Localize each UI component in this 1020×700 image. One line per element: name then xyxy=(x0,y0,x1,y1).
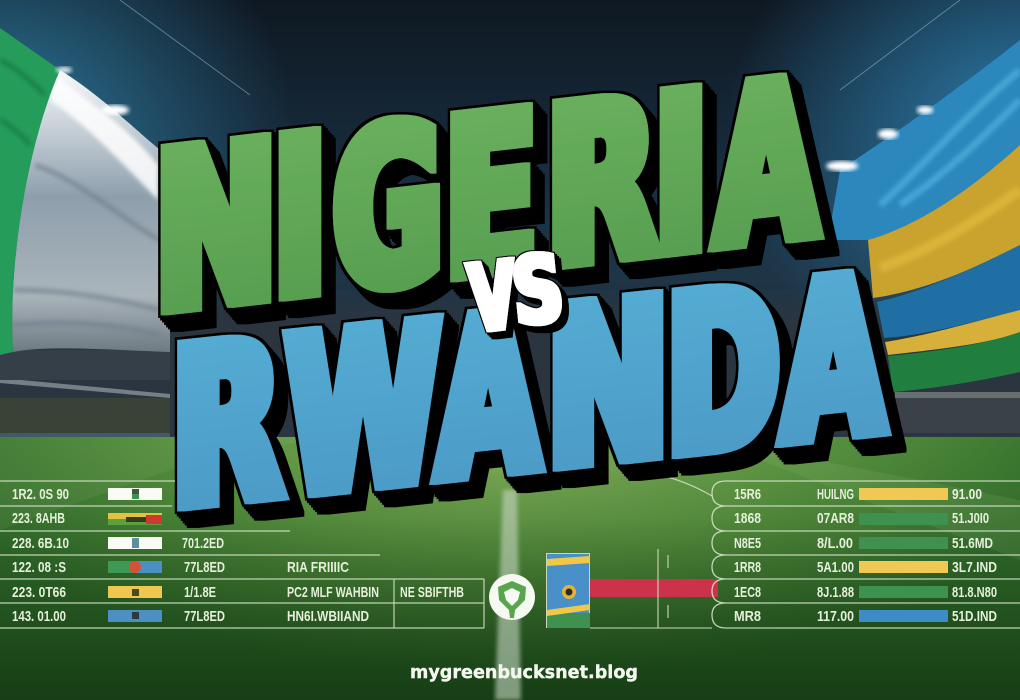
background: stadium stands xyxy=(0,305,1020,440)
title: NIGERIA: N xyxy=(155,95,277,361)
row 4: 3L7.IND xyxy=(952,559,997,576)
title: NIGERIA: R xyxy=(547,52,657,316)
title: RWANDA: N xyxy=(547,252,669,517)
row 4: 122. 08 :S xyxy=(12,559,66,576)
background: night sky xyxy=(0,0,1020,440)
row 6: 117.00 xyxy=(817,608,854,625)
flag: Rwanda xyxy=(828,40,1020,398)
row 5: 1EC8 xyxy=(734,584,761,601)
row 4 xyxy=(12,559,349,576)
row 2: 07AR8 xyxy=(817,510,854,527)
row 6: 143. 01.00 xyxy=(12,608,66,625)
row 5 xyxy=(734,584,997,601)
football pitch xyxy=(0,437,1020,700)
row 3: 228. 6B.10 xyxy=(12,535,69,552)
title: RWANDA: A xyxy=(782,230,884,492)
row 5 xyxy=(12,584,464,601)
row 1 xyxy=(734,486,982,503)
row 3: 701.2ED xyxy=(182,535,224,552)
row 2: 51.J0I0 xyxy=(952,510,989,527)
row 1: 15R6 xyxy=(734,486,761,503)
row 1: 1R2. 0S 90 xyxy=(12,486,69,503)
row 6: 51D.IND xyxy=(952,608,997,625)
row 4: RIA FRIIIIC xyxy=(287,559,349,576)
row 5: 223. 0T66 xyxy=(12,584,66,601)
title: NIGERIA: G xyxy=(333,77,443,341)
row 4: 5A1.00 xyxy=(817,559,854,576)
stadium floodlights xyxy=(56,67,933,171)
row 6 xyxy=(734,608,997,625)
title: NIGERIA: A xyxy=(715,34,817,297)
row 6 xyxy=(12,608,369,625)
title: RWANDA xyxy=(172,230,884,557)
red bar xyxy=(590,579,718,597)
fixture table: left xyxy=(0,481,484,628)
title: VS: S xyxy=(509,235,567,348)
row 5: 81.8.N80 xyxy=(952,584,997,601)
title: VS: V xyxy=(466,243,521,354)
row 5: PC2 MLF WAHBIN xyxy=(287,584,379,601)
row 5: 1/1.8E xyxy=(184,584,216,601)
title: RWANDA: A xyxy=(437,267,539,529)
row 2 xyxy=(734,510,989,527)
title: NIGERIA: I xyxy=(273,90,327,347)
row 5: NE SBIFTHB xyxy=(400,584,464,601)
title: VS xyxy=(466,235,567,354)
row 3: 8/L.00 xyxy=(817,535,853,552)
row 1 xyxy=(12,486,162,503)
row 4 xyxy=(734,559,997,576)
centre lines xyxy=(590,549,712,628)
row 3: 51.6MD xyxy=(952,535,993,552)
title: RWANDA: W xyxy=(286,277,440,545)
row 5: 8J.1.88 xyxy=(817,584,854,601)
flag: Nigeria xyxy=(0,28,170,355)
row 2: 223. 8AHB xyxy=(12,510,65,527)
row 3 xyxy=(734,535,993,552)
row 6: HN6I.WBIIAND xyxy=(287,608,369,625)
fixture table: right xyxy=(712,481,1020,628)
row 3: N8E5 xyxy=(734,535,761,552)
row 6: MR8 xyxy=(734,608,761,625)
title: RWANDA: D xyxy=(667,240,779,504)
row 4: 77L8ED xyxy=(184,559,225,576)
row 3 xyxy=(12,535,224,552)
row 2 xyxy=(12,510,162,527)
title: NIGERIA: E xyxy=(445,67,537,328)
title: RWANDA: R xyxy=(172,294,282,557)
flag: Rwanda small xyxy=(546,554,590,628)
row 1: 91.00 xyxy=(952,486,982,503)
title: NIGERIA: I xyxy=(654,47,708,304)
row 6: 77L8ED xyxy=(184,608,225,625)
title: NIGERIA xyxy=(155,34,817,361)
website label: mygreenbucksnet.blog xyxy=(410,662,638,683)
row 2: 1868 xyxy=(734,510,761,527)
row 1: HUILNG xyxy=(817,486,854,503)
row 4: 1RR8 xyxy=(734,559,761,576)
icon: shield logo xyxy=(489,574,535,620)
